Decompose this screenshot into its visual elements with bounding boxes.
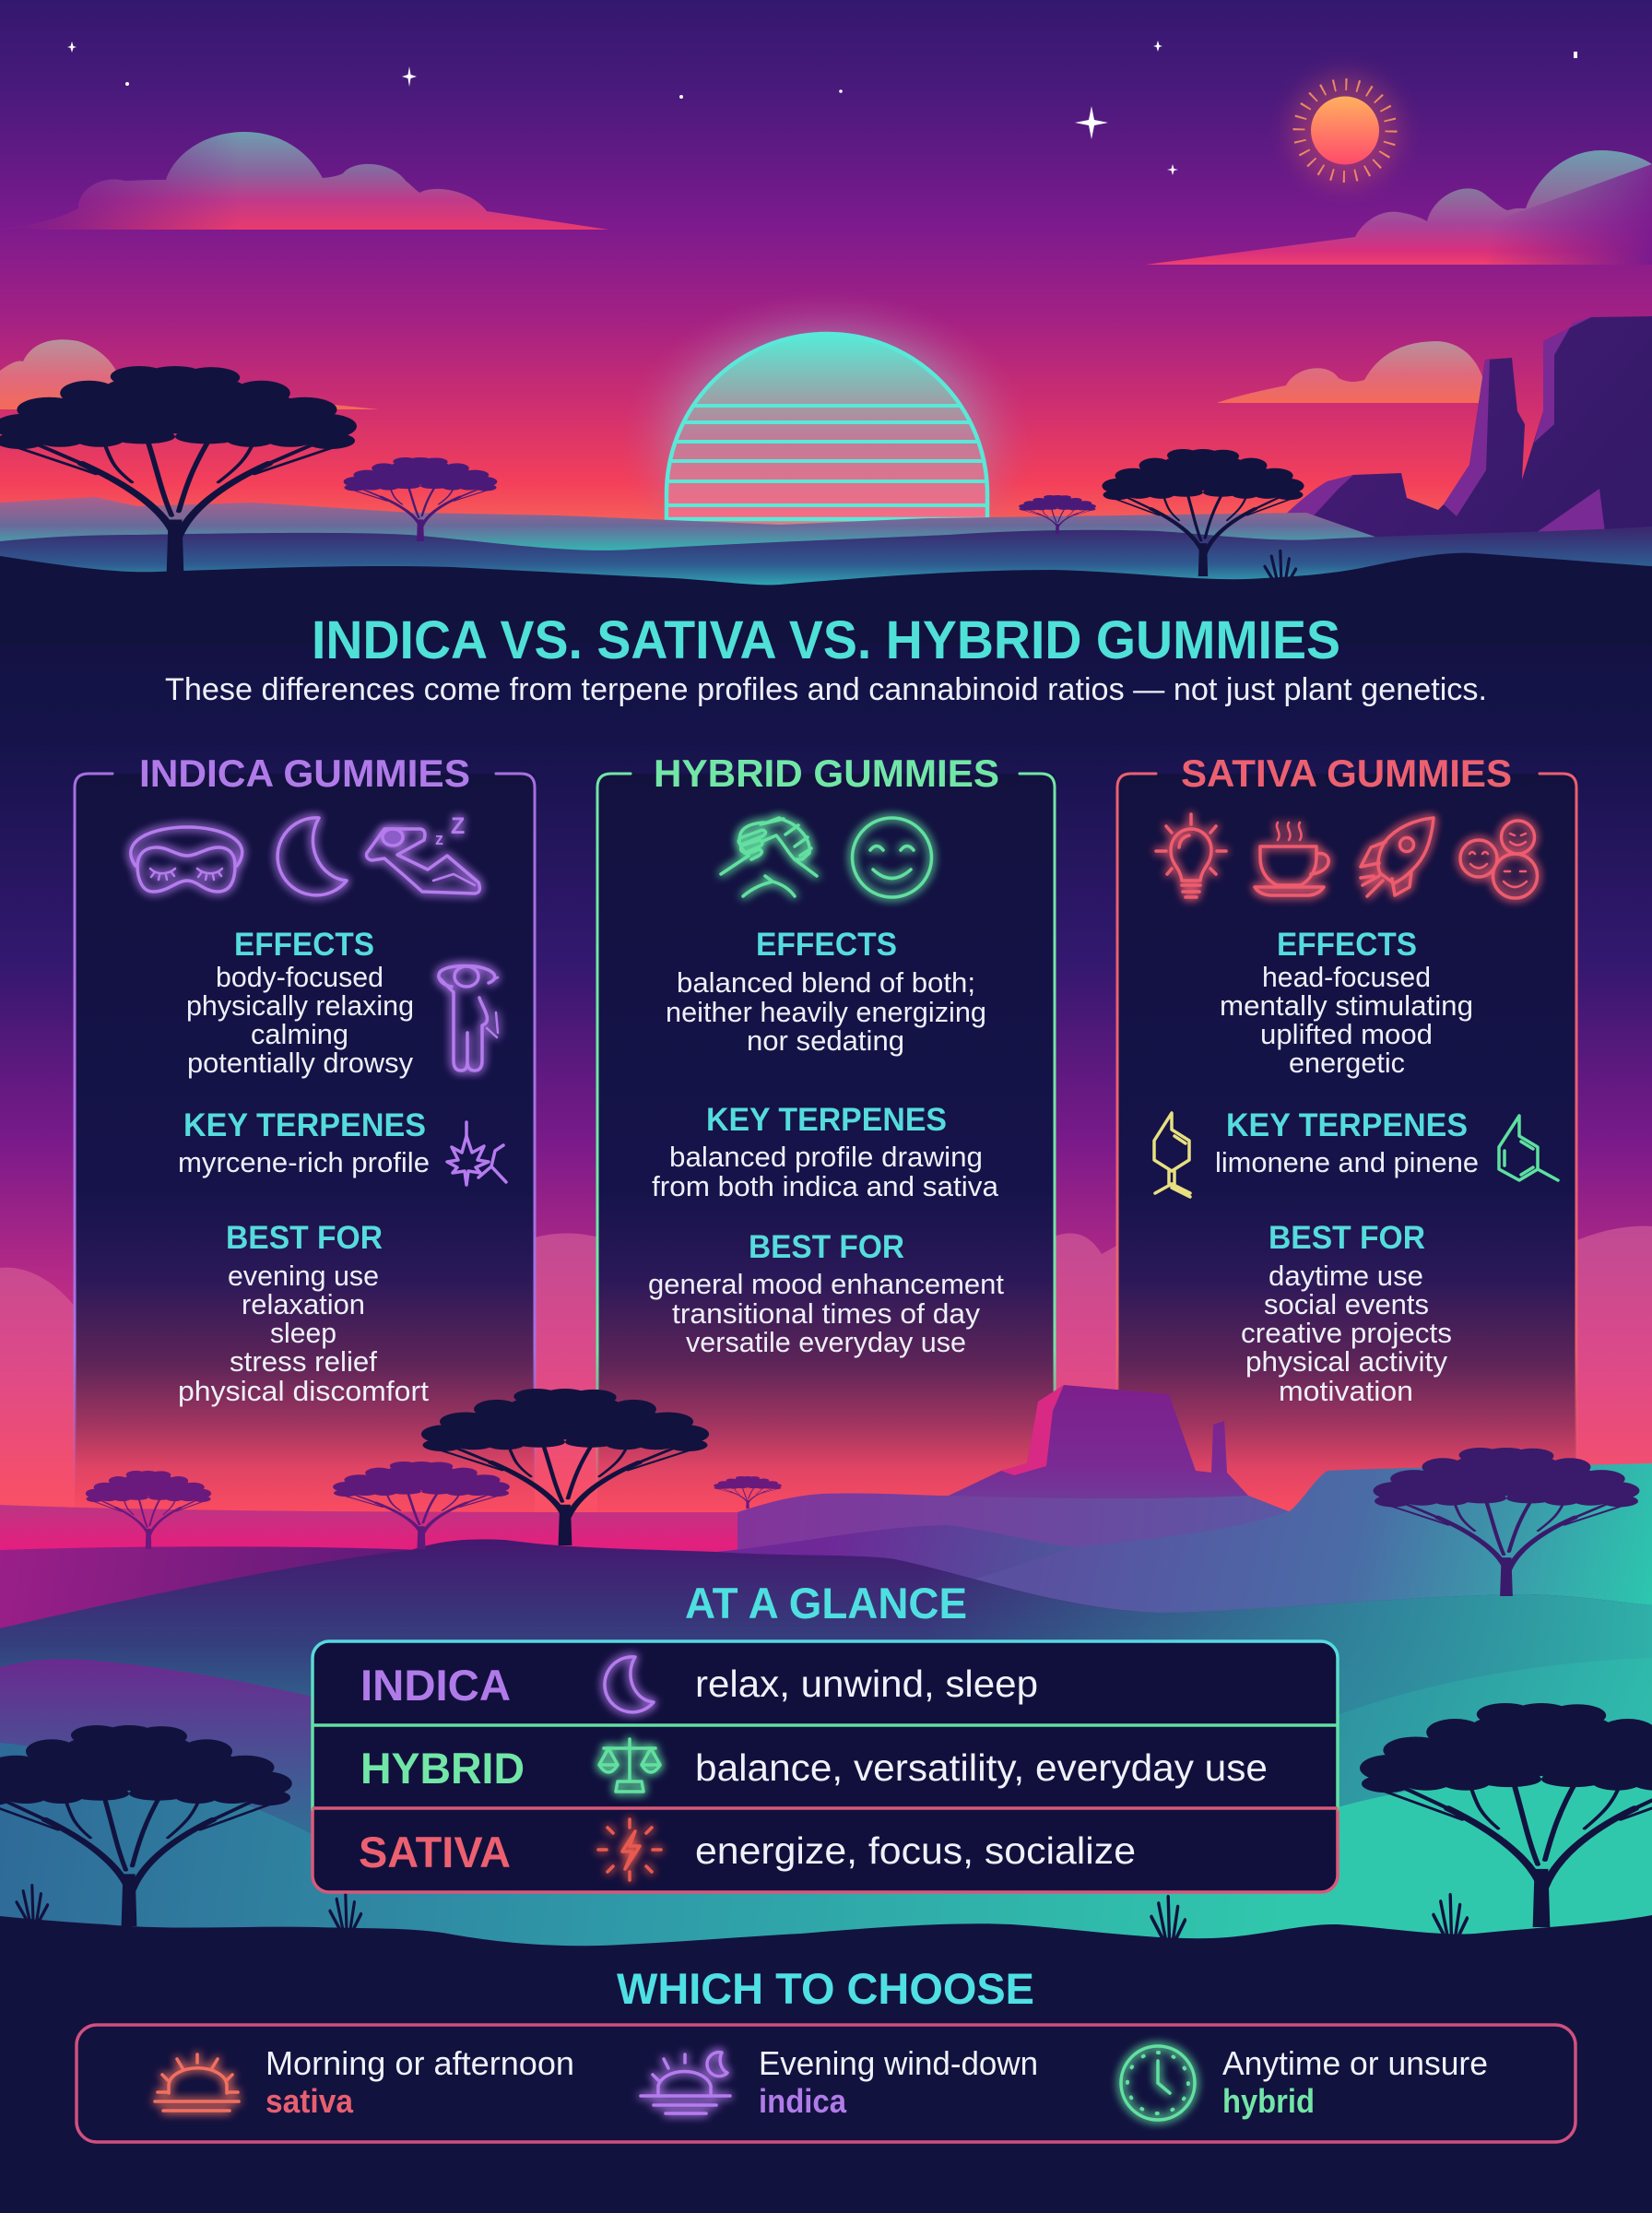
section: best for: general mood enhancement (648, 1268, 1004, 1300)
section: effects: nor sedating (747, 1024, 904, 1057)
section: key terpenes: balanced profile drawing (669, 1141, 983, 1173)
section: effects (1220, 927, 1473, 1079)
panel: which to choose (77, 2025, 1575, 2142)
section: key terpenes (178, 1107, 430, 1178)
section: key terpenes: myrcene-rich profile (178, 1146, 430, 1178)
section: effects (666, 927, 986, 1057)
row: indica: INDICA (360, 1661, 511, 1710)
section: effects: neither heavily energizing (666, 996, 986, 1028)
heading: hybrid gummies: HYBRID GUMMIES (654, 751, 999, 795)
icon: rocket (1361, 818, 1434, 896)
section: best for: evening use (228, 1260, 379, 1292)
section: effects: balanced blend of both; (677, 966, 975, 999)
section: best for: BEST FOR (226, 1220, 383, 1256)
section: effects: body-focused (216, 961, 384, 993)
row: indica (360, 1657, 1038, 1712)
section: effects: head-focused (1262, 961, 1431, 993)
section: key terpenes (1215, 1107, 1479, 1178)
grass tufts (17, 1886, 1467, 1940)
middle dusk background (0, 590, 1652, 1542)
stars (67, 41, 1577, 175)
row: sativa: energize, focus, socialize (695, 1829, 1136, 1872)
icon: relaxed body (439, 965, 498, 1071)
section: key terpenes: limonene and pinene (1215, 1146, 1479, 1178)
table: at a glance (313, 1641, 1338, 1892)
section: best for: BEST FOR (1268, 1220, 1425, 1256)
icon: person sleeping: z (435, 830, 443, 848)
section: best for: relaxation (242, 1288, 365, 1320)
icon: person sleeping (367, 813, 479, 893)
section: effects: calming (251, 1018, 348, 1050)
option: hybrid (1121, 2044, 1488, 2120)
section: best for: stress relief (230, 1345, 377, 1378)
panel: hybrid gummies (597, 751, 1055, 1531)
icon: pinene molecule (1499, 1116, 1558, 1180)
panel: indica gummies (75, 751, 535, 1531)
glowing striped sun (620, 290, 1034, 595)
section: key terpenes (652, 1102, 999, 1202)
option: sativa (155, 2044, 574, 2120)
dark ground (0, 1915, 1652, 2213)
section: effects: physically relaxing (186, 989, 414, 1022)
row: sativa: SATIVA (359, 1828, 511, 1876)
section: best for: BEST FOR (749, 1229, 904, 1265)
section: key terpenes: from both indica and sativa (652, 1170, 999, 1202)
section: effects (186, 927, 414, 1079)
icon: clock (1121, 2046, 1195, 2120)
section: best for: daytime use (1268, 1260, 1423, 1292)
icon: happy faces (1460, 821, 1538, 898)
heading: at a glance: AT A GLANCE (685, 1579, 967, 1627)
section: effects: energetic (1289, 1047, 1405, 1079)
section: effects: potentially drowsy (187, 1047, 413, 1079)
lower landscape (0, 1385, 1652, 1955)
row: indica: relax, unwind, sleep (695, 1663, 1038, 1705)
title: INDICA VS. SATIVA VS. HYBRID GUMMIES (312, 610, 1340, 670)
option: sativa: Morning or afternoon (266, 2044, 574, 2082)
section: effects: uplifted mood (1260, 1018, 1433, 1050)
dark foreground ridge (0, 553, 1652, 645)
icon: cannabis leaf with molecule (447, 1122, 506, 1185)
row: hybrid: balance, versatility, everyday use (695, 1746, 1268, 1789)
row: sativa (359, 1819, 1136, 1880)
rolling hills upper (0, 497, 1652, 599)
section: best for: social events (1264, 1288, 1429, 1320)
row: hybrid: HYBRID (360, 1744, 525, 1793)
icon: evening sun and moon (641, 2053, 730, 2113)
icon: sunrise (155, 2054, 239, 2111)
subtitle: These differences come from terpene profiles and cannabinoid ratios — not just plant genetics. (165, 672, 1487, 707)
option: indica: Evening wind-down (759, 2044, 1038, 2082)
sky background (0, 0, 1652, 590)
cloud: left low (0, 339, 379, 409)
cloud: upper left (0, 132, 608, 230)
desert mesa right (1264, 316, 1652, 539)
heading: sativa gummies: SATIVA GUMMIES (1181, 751, 1512, 795)
section: best for (1241, 1220, 1452, 1407)
section: effects: EFFECTS (756, 927, 897, 963)
option: hybrid: hybrid (1222, 2082, 1315, 2120)
icon: crescent moon (277, 818, 347, 895)
icon: smiley face (852, 818, 931, 897)
option: indica: indica (759, 2082, 847, 2120)
section: effects: EFFECTS (234, 927, 374, 963)
icon: light bulb (1156, 814, 1226, 897)
heading: which to choose: WHICH TO CHOOSE (617, 1964, 1034, 2013)
section: best for: sleep (270, 1317, 336, 1349)
section: best for: physical discomfort (178, 1375, 429, 1407)
icon: coffee cup (1255, 822, 1328, 895)
icon: limonene molecule (1154, 1113, 1190, 1197)
row: hybrid (360, 1739, 1268, 1793)
small glowing sun with rays (1292, 77, 1398, 183)
cloud: right low (1217, 341, 1496, 403)
side clouds behind panels (0, 1226, 1652, 1531)
option: hybrid: Anytime or unsure (1222, 2044, 1488, 2082)
section: key terpenes: KEY TERPENES (706, 1102, 947, 1138)
section: best for (178, 1220, 429, 1407)
icon: handshake (721, 818, 817, 896)
section: effects: mentally stimulating (1220, 989, 1473, 1022)
section: best for: versatile everyday use (686, 1326, 966, 1358)
upper tall trees (0, 366, 1304, 585)
icon: energy spark (598, 1819, 661, 1880)
section: best for: creative projects (1241, 1317, 1452, 1349)
icon: balance scales (599, 1739, 660, 1792)
heading: indica gummies: INDICA GUMMIES (139, 751, 470, 795)
icon: sleep mask (131, 827, 242, 892)
panel: sativa gummies (1117, 751, 1576, 1531)
icon: moon (605, 1657, 654, 1712)
section: key terpenes: KEY TERPENES (1226, 1107, 1468, 1143)
option: indica (641, 2044, 1038, 2120)
section: best for: transitional times of day (672, 1297, 981, 1330)
section: best for: motivation (1279, 1375, 1413, 1407)
trees upper background (344, 457, 1096, 541)
section: key terpenes: KEY TERPENES (183, 1107, 426, 1143)
section: best for: physical activity (1245, 1345, 1447, 1378)
section: best for (648, 1229, 1004, 1358)
lower trees (0, 1389, 1652, 1927)
cloud: upper right (1146, 150, 1652, 265)
icon: person sleeping: Z (451, 813, 465, 839)
option: sativa: sativa (266, 2082, 354, 2120)
section: effects: EFFECTS (1277, 927, 1417, 963)
